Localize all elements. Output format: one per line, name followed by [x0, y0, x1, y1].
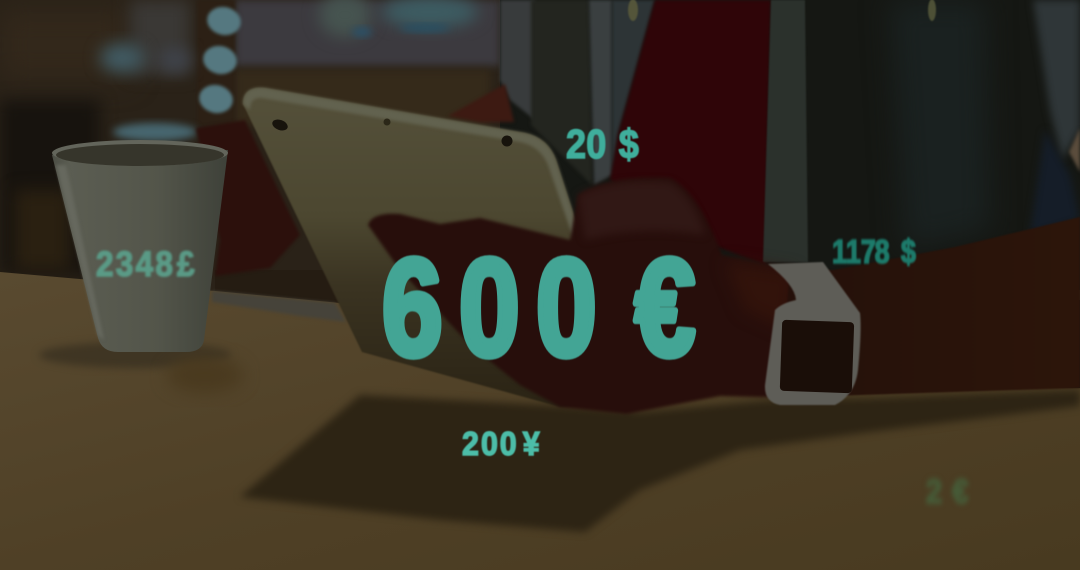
person torso: shirt and red t-shirt [448, 0, 1080, 290]
tablet [243, 88, 600, 407]
table wood reflection [212, 291, 346, 322]
forearm [780, 217, 1080, 398]
amount: 600 euro: 600 € [382, 231, 695, 385]
bokeh lights [196, 4, 244, 116]
amount: 2348 pounds: 2348 £ [96, 246, 195, 284]
amount: 20 dollars: 20 $ [566, 122, 639, 168]
cup [52, 140, 228, 352]
smartwatch [765, 262, 861, 405]
blurred cafe background [0, 0, 1080, 306]
amount: 1178 faded: 1178 $ [832, 235, 916, 271]
amount: 200 yen: 200 ¥ [462, 425, 540, 462]
amount: faded small value: 2 € [926, 472, 968, 511]
table top [0, 272, 1080, 570]
cup shadow on table [39, 342, 243, 393]
tablet shadow on table [240, 390, 1080, 532]
left hand behind tablet [196, 120, 300, 276]
hand holding tablet [368, 178, 800, 414]
